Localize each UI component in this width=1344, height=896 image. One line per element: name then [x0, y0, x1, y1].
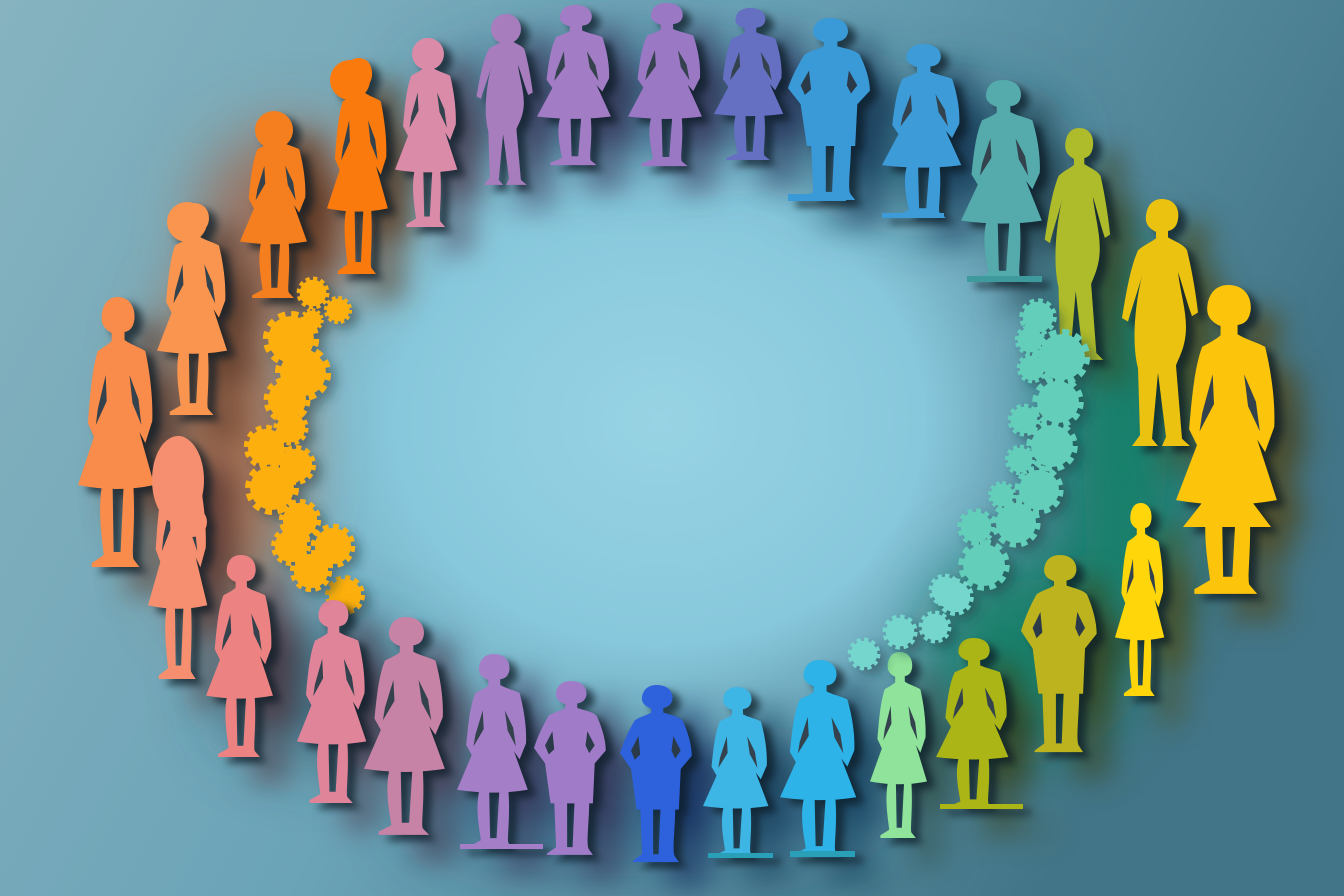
- figure 14 yellow: [1122, 199, 1198, 446]
- coloured glow behind ring: [155, 45, 1190, 860]
- figure 10 blue coat: [788, 18, 870, 201]
- figure 20 sky blue: [780, 660, 856, 857]
- figure 23 violet: [534, 681, 606, 855]
- figure 21 sky blue: [703, 687, 773, 858]
- figure 2 orange short dress, curly hair: [157, 202, 227, 415]
- figure 13 lime: [1045, 128, 1110, 360]
- figure 16 yellow slim: [1115, 503, 1164, 696]
- figure 12 teal: [961, 80, 1042, 282]
- figure 26 rose: [297, 600, 366, 803]
- figure 15 large amber tiered dress: [1176, 285, 1277, 594]
- figure 17 olive: [1021, 555, 1097, 752]
- figure 27 coral: [206, 555, 273, 757]
- figure 3 deep orange, curly hair: [240, 111, 307, 298]
- figure 5 pink: [395, 38, 457, 227]
- figure 11 blue: [882, 44, 961, 218]
- orange gear cluster: [246, 278, 353, 590]
- figure 7 purple: [537, 5, 611, 165]
- figure 18 olive dress: [936, 638, 1023, 809]
- figure 19 mint: [870, 652, 927, 838]
- figure 6 lilac: [476, 14, 533, 185]
- teal gear cluster: [849, 300, 1087, 669]
- figure 28 salmon curly hair: [148, 436, 207, 679]
- figure 25 mauve: [364, 617, 445, 835]
- figure 4 bright orange, curly hair: [327, 58, 388, 274]
- figure 8 purple: [628, 3, 702, 166]
- partly hidden orange gear: [327, 577, 363, 613]
- figure 9 indigo: [714, 8, 783, 160]
- figure 22 royal blue coat: [620, 685, 692, 862]
- figure 24 violet dress: [457, 654, 543, 849]
- figure 1 orange dress: [78, 297, 154, 567]
